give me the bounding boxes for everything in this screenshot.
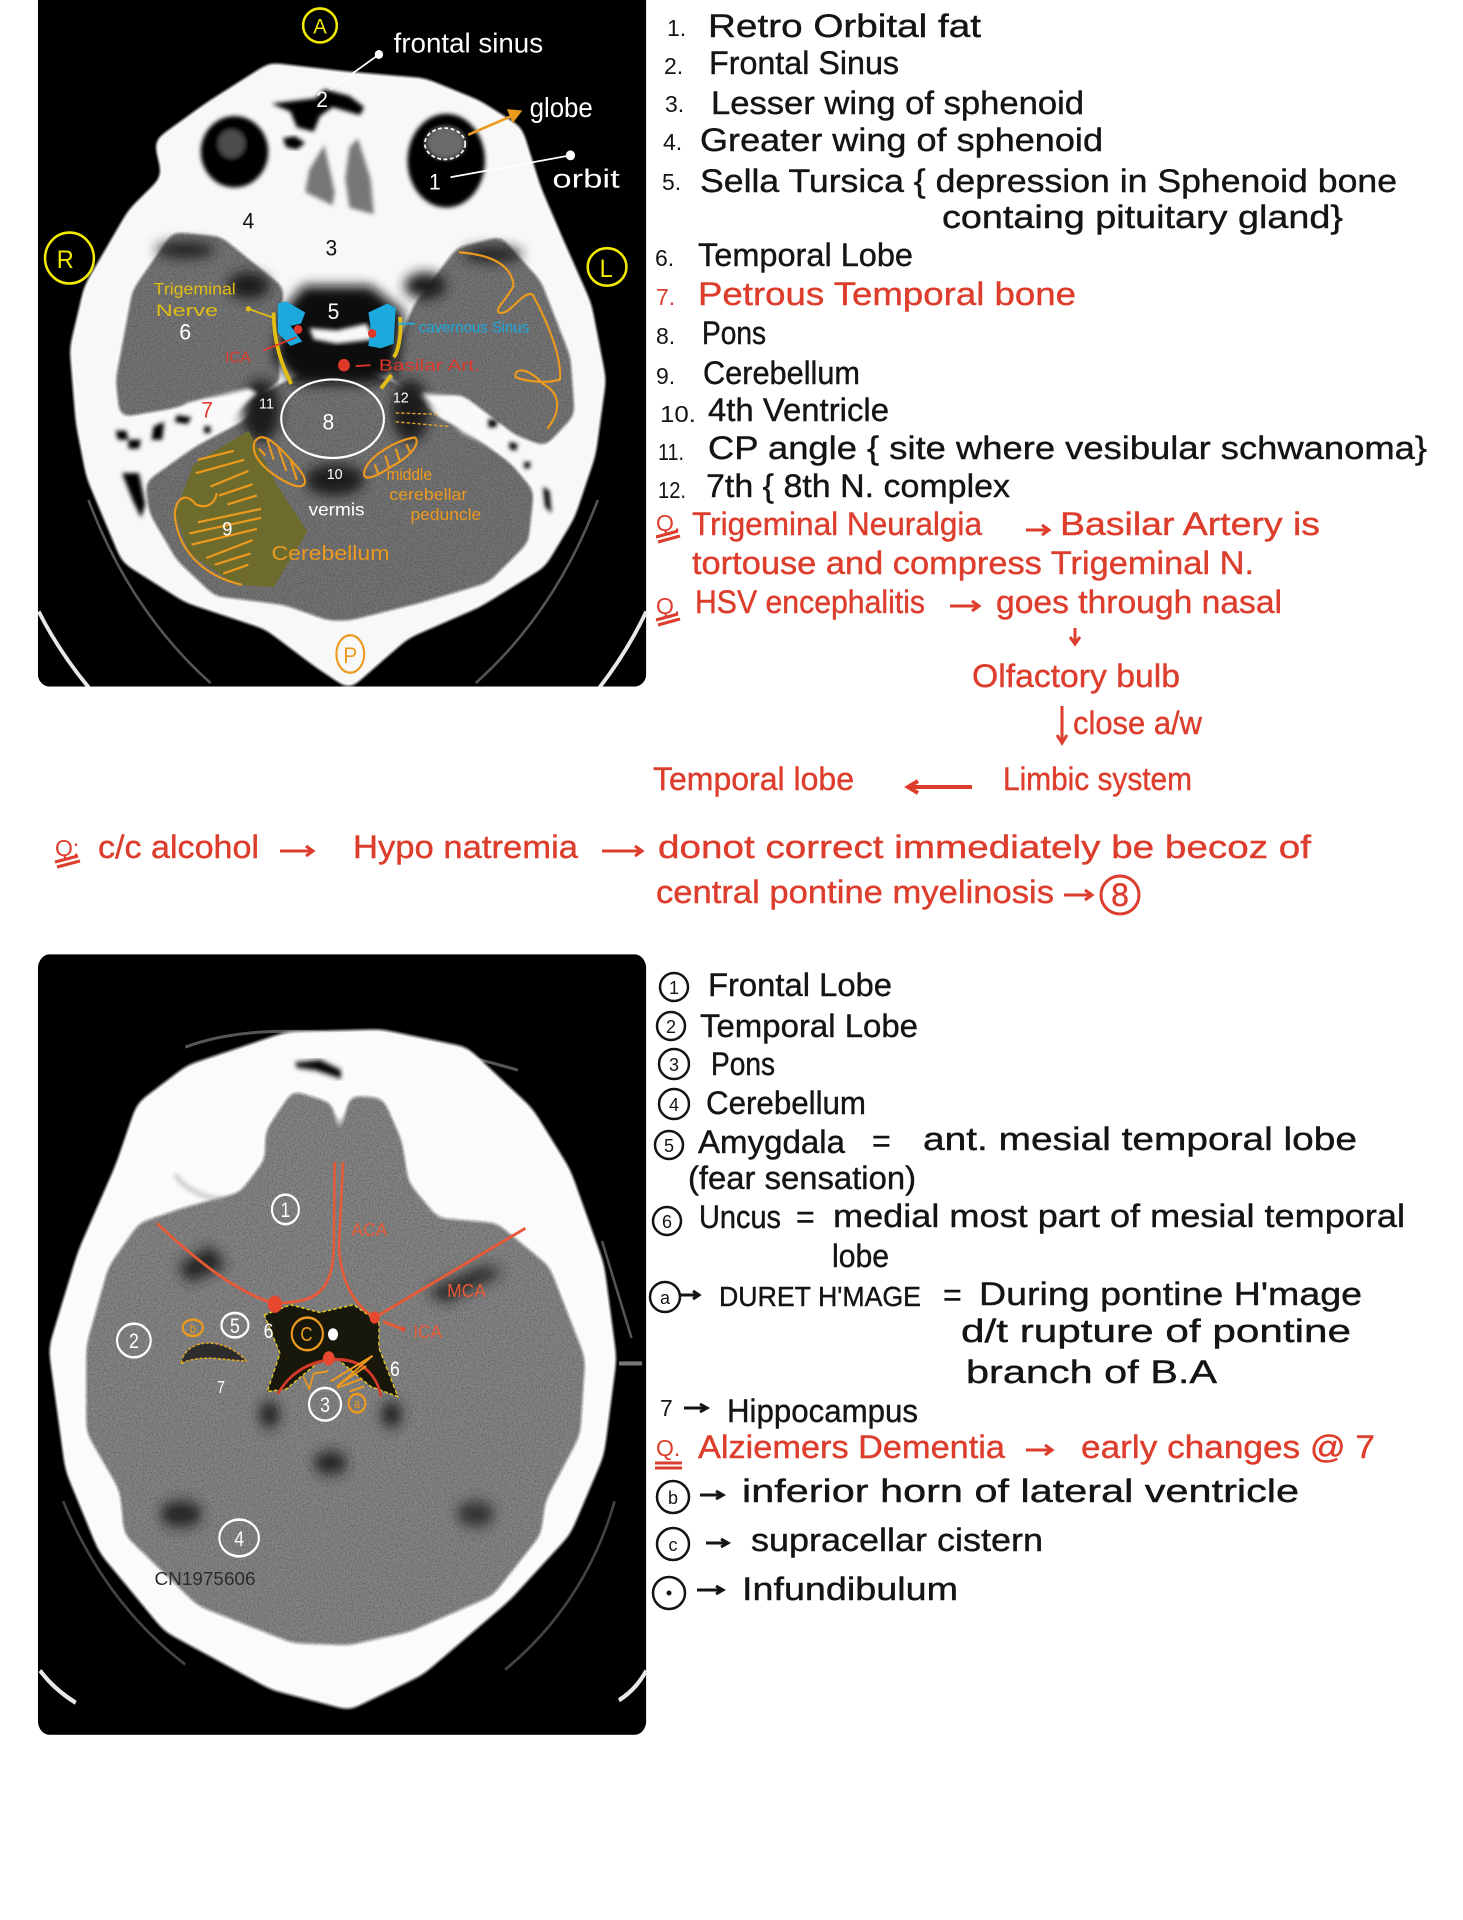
labels orange letters: a [354,1396,360,1411]
item circled b: inferior horn of lateral ventricle [742,1473,1299,1509]
item 4: 4. [663,129,682,155]
item 8: Pons [702,315,766,351]
question: HSV encephalitis flow [653,584,1282,797]
pituitary bright band [309,324,375,344]
question: trigeminal neuralgia: tortouse and compress Trigeminal N. [692,545,1254,581]
label: middle cerebellar peduncle [386,465,481,524]
labels orange letters [190,1321,360,1411]
numbered labels on scan: 7 [201,397,213,423]
question: HSV encephalitis flow: goes through nasal [996,584,1282,620]
numbered labels on scan: 1 [429,169,441,195]
text block: anatomy list for lower scan [650,967,1405,1609]
label: orbit: orbit [552,165,620,194]
ethmoid air cells left [305,145,335,205]
item 3: 3. [665,91,684,117]
item circled a: Duret haemorrhage: = [943,1277,962,1313]
question: alcohol hyponatremia: 8 [1111,877,1129,913]
annotation: pons outline [281,379,384,458]
numbered labels on scan [179,87,441,541]
annotation: artery dots [268,1296,405,1366]
right temporal lobe [389,237,575,446]
brain parenchyma [86,1091,585,1645]
question: Alzheimers dementia: early changes @ 7 [1081,1429,1375,1465]
item circled 1: 1 [669,978,679,998]
item circled 5: = [872,1123,891,1159]
question: alcohol hyponatremia: c/c alcohol [98,829,259,865]
label: globe: globe [530,92,593,123]
numbered labels on scan: 7 [217,1379,225,1397]
item 10: 4th Ventricle [708,392,889,428]
item 7 hippocampus: Hippocampus [727,1393,918,1429]
label: MCA: MCA [447,1281,487,1302]
labels orange letters: b [190,1321,196,1336]
item 5: 5. [662,169,681,195]
numbered labels on scan: 10 [327,467,343,483]
item circled a: Duret haemorrhage: DURET H'MAGE [719,1281,921,1312]
question: HSV encephalitis flow: close a/w [1073,705,1203,741]
numbered labels on scan: 8 [323,409,334,435]
panel: lower axial CT scan with annotations [38,954,646,1735]
right orbit [408,114,485,208]
label: frontal sinus: frontal sinus [394,28,543,59]
label: trigeminal nerve: Nerve [156,302,218,320]
scalp arcs [39,500,646,690]
item 8: 8. [656,323,675,349]
label: basilar artery: Basilar Art. [379,357,480,375]
item 6: Temporal Lobe [698,237,913,273]
item circled b [657,1473,1299,1513]
item circled a: Duret haemorrhage: d/t rupture of pontine [961,1313,1351,1349]
labels: orientation letters [45,8,626,286]
label: P [336,635,364,673]
item circled a: Duret haemorrhage [650,1276,1362,1390]
labels orange letters: C [300,1322,313,1345]
label: cerebellum: Cerebellum [272,543,389,565]
annotation: middle cerebellar peduncles [254,437,417,486]
item 9: Cerebellum [703,355,860,391]
question: HSV encephalitis flow: Temporal lobe [653,761,854,797]
skull bone [69,62,606,690]
item circled c: c [668,1535,678,1555]
question: alcohol hyponatremia: Q: [55,835,79,861]
item 3: Lesser wing of sphenoid [711,85,1084,121]
annotation: ICA and basilar artery markers [263,325,376,371]
label: ACA: ACA [352,1220,388,1240]
item circled dot [653,1571,958,1609]
annotation: cerebellum outline [175,451,261,585]
annotation: globe arrow [468,109,522,135]
left temporal lobe [116,232,284,417]
annotation: pointer lines [330,51,574,177]
frontal sinus air space [272,89,364,132]
item 7: 7. [656,284,675,310]
item 11: CP angle { site where vesibular schwanoma} [708,430,1427,466]
posterior fossa: cerebellum [145,373,534,620]
skull bone [48,1029,617,1710]
annotation: arteries ACA MCA ICA [157,1162,525,1397]
item 8 [656,315,766,351]
annotation: infundibulum dot [328,1328,338,1341]
annotation: temporal lobe outline [459,252,560,429]
question: Alzheimers dementia [655,1429,1375,1468]
item 7 hippocampus: 7 [660,1395,673,1421]
item circled a: Duret haemorrhage: branch of B.A [966,1354,1218,1390]
item circled 3 [659,1046,775,1082]
outer scalp arcs [40,1031,646,1703]
item circled 4: Cerebellum [706,1085,866,1121]
item circled 6: = [796,1199,815,1235]
petrous bone [182,386,259,414]
numbered labels on scan: 4 [234,1528,244,1552]
numbered labels on scan: 5 [328,299,339,324]
numbered labels on scan: 2 [316,87,328,112]
text block: anatomy list for upper scan [655,8,1427,504]
item circled 6: Uncus [699,1199,781,1235]
question: HSV encephalitis flow: HSV encephalitis [695,584,925,620]
item 6: 6. [655,245,674,271]
annotation: hemorrhage scribbles [303,1356,373,1392]
mastoid air cells [116,415,552,518]
annotation: trigeminal nerve lines [246,306,401,388]
left orbit [201,116,268,187]
question: Alzheimers dementia: Q. [656,1435,680,1461]
question: alcohol hyponatremia: central pontine myelinosis [656,874,1054,910]
label: middle cerebellar peduncle: middle [386,465,432,484]
item 10: 10. [660,401,696,427]
item circled c: supracellar cistern [751,1522,1043,1558]
item 1: 1. [667,15,686,41]
question: trigeminal neuralgia [656,506,1320,581]
dark sulci [160,1246,505,1527]
item circled 4: 4 [669,1095,679,1115]
numbered labels on scan: 6 [264,1319,274,1343]
item circled a: Duret haemorrhage: a [660,1288,671,1308]
question: HSV encephalitis flow: Limbic system [1003,761,1192,797]
label: cavernous sinus: cavernous Sinus [419,319,529,337]
label: middle cerebellar peduncle: cerebellar [389,486,468,504]
item 5: containg pituitary gland} [942,199,1343,235]
label: L: L [600,255,613,283]
item circled 5: Amygdala [698,1124,845,1160]
item circled 3: Pons [711,1046,775,1082]
question: alcohol hyponatremia: Hypo natremia [353,829,578,865]
annotation: globe dashed outline [425,128,465,159]
item circled 6: 6 [662,1212,672,1232]
item circled 5: 5 [664,1136,674,1156]
label: trigeminal nerve: Trigeminal [154,280,236,299]
question: alcohol hyponatremia [55,829,1311,914]
annotation: 7th and 8th nerve dashes [396,413,448,426]
dark cisterns [156,242,522,496]
item 4: Greater wing of sphenoid [700,122,1103,158]
question: HSV encephalitis flow: Olfactory bulb [972,658,1180,694]
annotation: circled labels orange [183,1318,365,1412]
label: ICA: ICA [413,1322,443,1342]
item 5 [662,163,1397,235]
numbered labels on scan: 12 [393,390,409,407]
item 12: 12. [658,477,686,503]
question: Alzheimers dementia: Alziemers Dementia [698,1429,1005,1465]
item circled 5 [655,1121,1357,1196]
question: HSV encephalitis flow: Q. [656,593,680,619]
label: vermis: vermis [309,499,365,520]
label: P: P [343,642,357,668]
item circled dot: Infundibulum [742,1571,958,1607]
frontal bump of bone [175,1175,223,1200]
watermark: CN1975606: CN1975606 [155,1569,256,1589]
numbered labels on scan: 6 [390,1358,400,1382]
question: trigeminal neuralgia: Q. [656,510,680,536]
annotation: cavernous sinus blue shapes [278,301,415,348]
numbered labels on scan: 3 [320,1393,330,1417]
label: R: R [57,246,74,274]
item 11: 11. [658,439,684,465]
item 12: 7th { 8th N. complex [706,468,1010,504]
item 2: Frontal Sinus [709,45,899,81]
numbered labels on scan: 11 [259,396,274,413]
item circled a: Duret haemorrhage: During pontine H'mage [979,1276,1362,1312]
label: A: A [313,15,327,39]
label: trigeminal nerve [154,282,234,316]
numbered labels on scan: 9 [222,519,232,541]
numbered labels on scan: 2 [129,1330,139,1354]
annotation: inferior horn dashed outline [181,1343,246,1363]
item circled 6: lobe [832,1238,889,1274]
item circled 5: (fear sensation) [688,1160,916,1196]
cerebellum highlight overlay [175,431,307,587]
item circled 2: Temporal Lobe [700,1008,918,1044]
label: ICA: ICA [225,349,251,367]
label: middle cerebellar peduncle: peduncle [410,506,481,524]
numbered labels on scan: 6 [179,319,191,344]
panel: upper axial CT scan with annotations [38,0,646,690]
numbered labels on scan: 4 [243,208,254,234]
suprasellar cistern [264,1305,398,1397]
question: alcohol hyponatremia: donot correct immediately be becoz of [658,829,1311,865]
frontal sinus [295,1060,341,1079]
question: trigeminal neuralgia: Basilar Artery is [1060,506,1320,542]
annotation: circled labels [117,1195,341,1556]
numbered labels on scan: 3 [325,235,337,260]
question: trigeminal neuralgia: Trigeminal Neuralgia [692,506,982,542]
item 7: Petrous Temporal bone [698,276,1076,312]
item circled 5: ant. mesial temporal lobe [923,1121,1357,1157]
numbered labels on scan: 1 [281,1198,290,1222]
ethmoid air cells right [345,138,374,214]
item 1: Retro Orbital fat [708,8,981,44]
item circled 1: Frontal Lobe [708,967,892,1003]
item circled b: b [668,1488,678,1508]
item 9: 9. [656,363,675,389]
item circled 6 [653,1198,1405,1274]
item circled 2: 2 [666,1017,676,1037]
item 2: 2. [664,53,683,79]
item circled 6: medial most part of mesial temporal [833,1198,1405,1234]
item 5: Sella Tursica { depression in Sphenoid bone [700,163,1397,199]
item circled c [657,1522,1043,1560]
item circled 3: 3 [669,1055,679,1075]
numbered labels on scan [129,1198,400,1552]
numbered labels on scan: 5 [230,1314,240,1338]
